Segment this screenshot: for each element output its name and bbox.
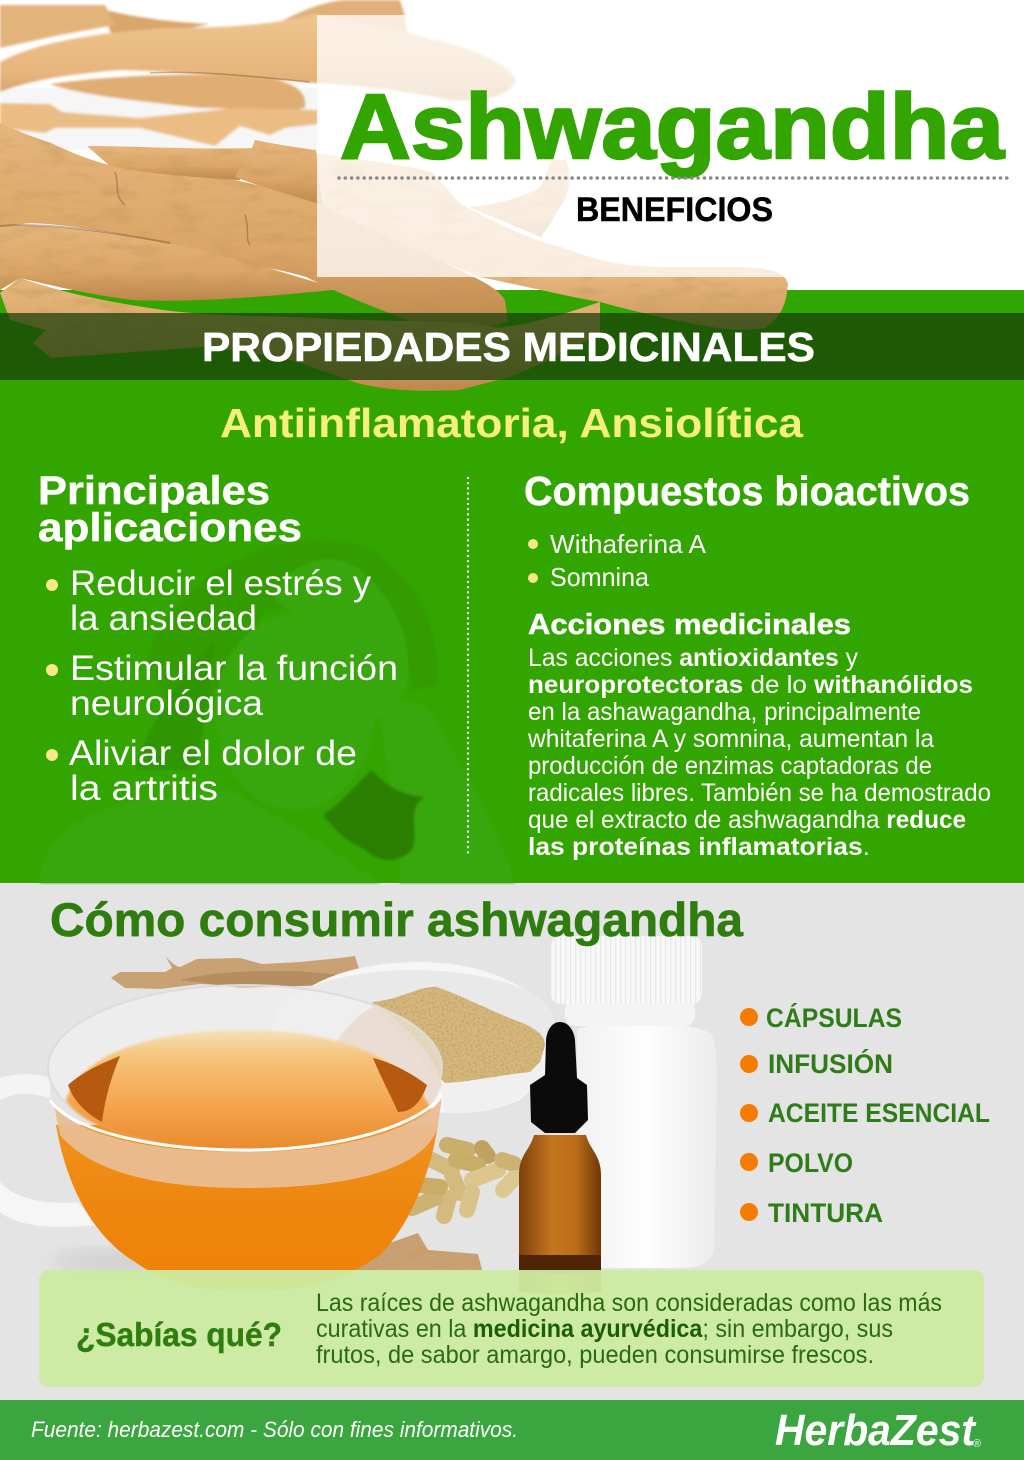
heading: como consumir: Cómo consumir ashwagandha <box>50 893 744 946</box>
footer source: Fuente: herbazest.com - Sólo con fines informativos. <box>31 1417 518 1442</box>
photo: root powder <box>372 987 545 1083</box>
list: formas de consumo: ACEITE ESENCIAL <box>768 1098 990 1128</box>
text block: acciones medicinales <box>527 644 991 861</box>
logo: HerbaZest: ® <box>973 1438 981 1450</box>
text block: acciones medicinales: whitaferina A y somnina, aumentan la <box>527 725 934 753</box>
list: principales aplicaciones: neurológica <box>70 684 264 723</box>
heading: principales aplicaciones: Principales <box>38 469 270 513</box>
callout text: curativas en la medicina ayurvédica; sin embargo, sus <box>316 1315 893 1343</box>
text block: acciones medicinales: radicales libres. También se ha demostrado <box>528 779 991 807</box>
list: principales aplicaciones: Reducir el estrés y <box>70 564 372 603</box>
photo: ashwagandha roots <box>0 123 788 391</box>
properties subtitle: Antiinflamatoria, Ansiolítica <box>220 400 804 446</box>
text block: acciones medicinales: neuroprotectoras de lo withanólidos <box>528 671 973 699</box>
subtitle: BENEFICIOS <box>576 191 773 229</box>
background photo: woman with headache <box>40 540 515 883</box>
dark band <box>0 313 1024 380</box>
photo: white bowl <box>270 962 558 1113</box>
title: Ashwagandha <box>340 76 1005 178</box>
translucent title panel <box>317 15 1024 277</box>
photo: bottom roots <box>260 1233 482 1270</box>
photo: small dried roots <box>111 955 360 989</box>
heading: compuestos bioactivos: Compuestos bioactivos <box>524 468 970 514</box>
list: compuestos: Somnina <box>550 562 650 592</box>
dotted column divider <box>467 478 469 855</box>
callout text <box>316 1289 942 1369</box>
list: formas de consumo: INFUSIÓN <box>768 1048 893 1079</box>
photo: amber dropper bottle <box>519 1022 601 1294</box>
heading: principales aplicaciones <box>38 469 302 550</box>
text block: acciones medicinales: las proteínas inflamatorias . <box>528 833 870 861</box>
list: principales aplicaciones: la ansiedad <box>70 599 257 638</box>
list: formas de consumo: POLVO <box>768 1148 853 1178</box>
text block: acciones medicinales: Las acciones antioxidantes y <box>528 644 858 672</box>
text block: acciones medicinales: que el extracto de ashwagandha reduce <box>528 806 966 834</box>
list: formas de consumo: TINTURA <box>768 1198 883 1228</box>
root cracks and shadows <box>0 72 310 245</box>
list: principales aplicaciones <box>46 564 398 808</box>
section heading: propiedades medicinales: PROPIEDADES MEDICINALES <box>202 324 815 370</box>
heading: principales aplicaciones: aplicaciones <box>38 506 302 550</box>
photo: blurred back roots <box>0 0 516 150</box>
photo: cup of tea <box>0 985 442 1291</box>
text block: acciones medicinales: producción de enzimas captadoras de <box>528 752 932 780</box>
dotted title rule <box>339 176 1007 180</box>
callout text: frutos, de sabor amargo, pueden consumirse frescos. <box>316 1341 874 1369</box>
photo: capsules <box>412 1145 514 1216</box>
list: principales aplicaciones: Estimular la función <box>70 649 398 688</box>
logo: HerbaZest: HerbaZest <box>775 1406 977 1455</box>
list: principales aplicaciones: la artritis <box>70 769 218 808</box>
callout heading: ¿Sabías qué? <box>76 1316 282 1353</box>
text block: acciones medicinales: en la ashawagandha, principalmente <box>528 698 921 726</box>
footer bar <box>0 1400 1024 1460</box>
list: compuestos: Withaferina A <box>550 529 707 559</box>
list: formas de consumo <box>740 1002 990 1228</box>
heading: acciones medicinales: Acciones medicinales <box>528 609 851 641</box>
list: formas de consumo: CÁPSULAS <box>766 1002 902 1033</box>
list: compuestos <box>528 529 707 592</box>
list: principales aplicaciones: Aliviar el dolor de <box>69 734 357 773</box>
photo: white bottle <box>551 936 717 1268</box>
callout text: Las raíces de ashwagandha son consideradas como las más <box>316 1289 942 1317</box>
callout panel <box>39 1270 984 1387</box>
